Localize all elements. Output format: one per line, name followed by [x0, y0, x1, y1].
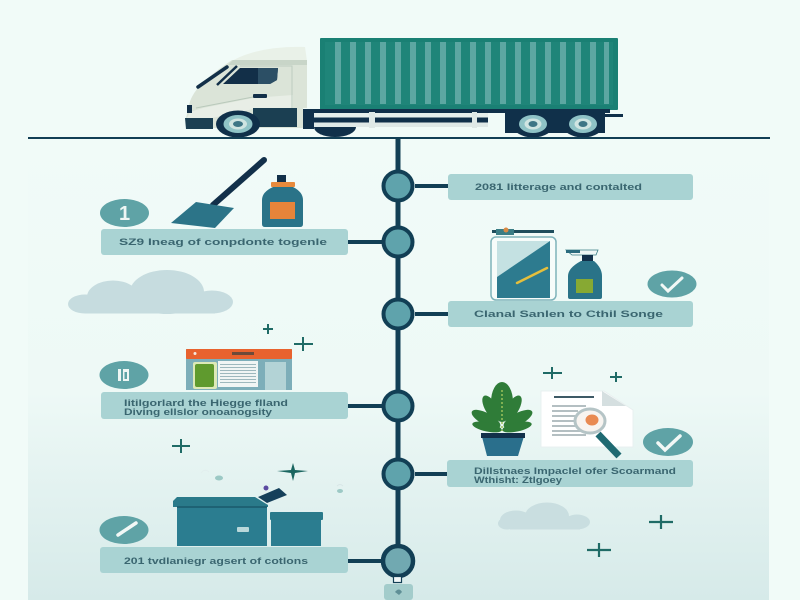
panel: top right label [448, 174, 693, 200]
timeline spine [396, 138, 400, 562]
panel: shovel label: SZ9 Ineag of conpdonte togenle [119, 237, 327, 248]
icon: lid and purple dot [258, 486, 287, 503]
sparkle: lower right 2 [587, 543, 611, 557]
badge: check right upper [648, 270, 696, 298]
icon: bottom tag [384, 576, 413, 600]
icon: bottle with orange label [262, 175, 303, 227]
badge: check right lower [643, 428, 693, 456]
connector: node 5 [415, 472, 448, 476]
panel: plant label [447, 460, 693, 487]
truck cab [185, 47, 307, 129]
trailer chassis [303, 109, 623, 137]
connector: node 3 [415, 312, 448, 316]
panel: plant label: Dillstnaes Impaclel ofer Scoarmand [474, 466, 676, 477]
panel: jar label [448, 301, 693, 327]
node 6 [383, 546, 413, 576]
badge: number 1: 1 [119, 203, 130, 225]
connector: node 6 [348, 559, 383, 563]
cloud: right [498, 502, 590, 530]
icon: glass jar [491, 228, 556, 300]
shipping container [320, 38, 618, 110]
connector: node 2 [348, 240, 383, 244]
sparkle: mid left [172, 439, 190, 453]
node 3 [384, 300, 412, 328]
panel: plant label: Wthisht: Ztlgoey [474, 475, 563, 486]
icon: shovel [171, 160, 264, 228]
sparkle: plant 1 [543, 367, 562, 379]
sparkle: lower right 1 [649, 515, 673, 529]
icon: document with magnifier [541, 391, 633, 456]
sparkle: top middle 1 [263, 324, 273, 334]
badge: info [100, 361, 148, 389]
badge: slash check [100, 516, 148, 544]
cloud: left [68, 270, 233, 314]
connector: node 1 [415, 184, 448, 188]
sparkle: bins [277, 463, 308, 481]
icon: potted plant [469, 382, 535, 456]
node 4 [384, 392, 412, 420]
connector: node 4 [348, 404, 383, 408]
panel: document label [101, 392, 348, 419]
road line [28, 137, 770, 139]
badge: number 1 [100, 199, 149, 227]
icon: document window [186, 349, 292, 390]
panel: top right label: 2081 Iitterage and contalted [475, 182, 642, 193]
panel: shovel label [101, 229, 348, 255]
node 5 [384, 460, 412, 488]
panel: jar label: Clanal Sanlen to Cthil Songe [474, 309, 663, 320]
icon: small bin [270, 512, 323, 546]
sparkle: top middle 2 [294, 337, 313, 351]
panel: bins label [100, 547, 348, 573]
icon: large bin [173, 497, 268, 546]
decorative dots near bins [201, 470, 343, 493]
cab window [223, 68, 278, 84]
panel: document label: Diving ellslor onoanogsity [124, 407, 273, 418]
panel: bins label: 201 tvdlaniegr agsert of cotlons [124, 556, 308, 567]
node 1 [384, 172, 412, 200]
panel: document label: Iitilgorlard the Hiegge flland [124, 398, 288, 409]
wheels [216, 110, 604, 138]
sparkle: plant 2 [610, 372, 622, 382]
node 2 [384, 228, 412, 256]
icon: spray bottle [566, 250, 602, 299]
illustration: container truck [185, 38, 623, 138]
